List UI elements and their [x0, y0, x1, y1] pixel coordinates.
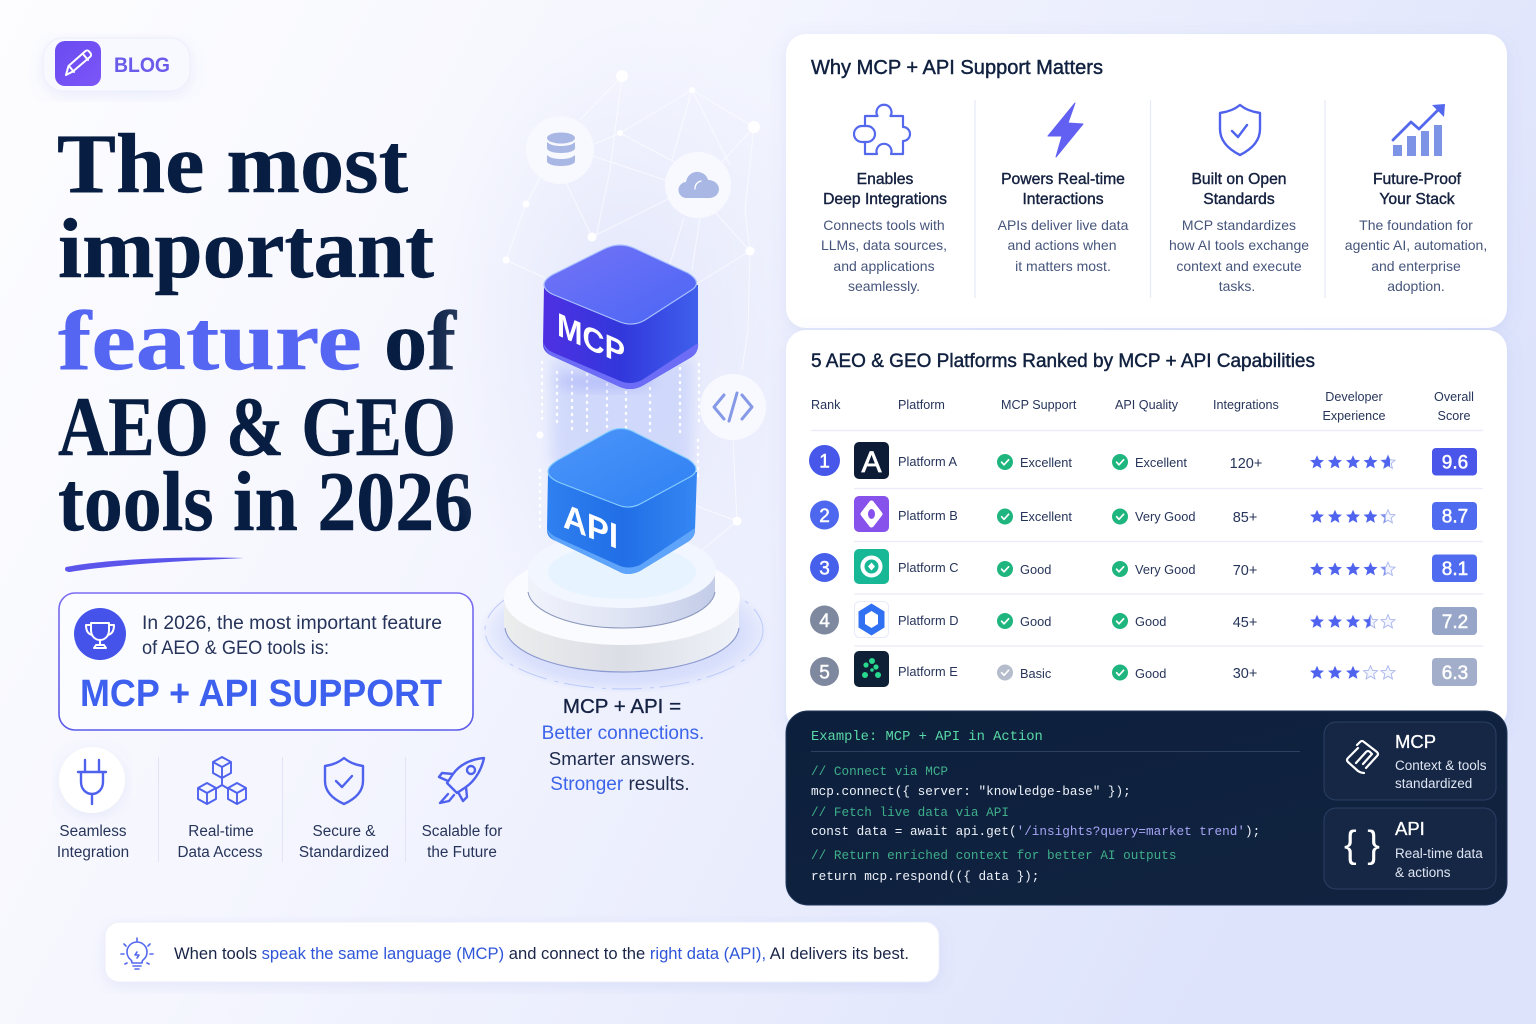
- row: Platform B: Very Good: [1135, 509, 1195, 524]
- row: Platform B: [810, 496, 1477, 532]
- row: Platform E: Good: [1135, 666, 1166, 681]
- column: real-time interactions: and actions when: [1008, 237, 1116, 253]
- row: Platform A: Excellent: [1020, 455, 1072, 470]
- table header: Experience: [1322, 409, 1386, 423]
- code block: // Fetch live data via API: [811, 805, 1009, 820]
- row: Platform B: 85+: [1233, 510, 1257, 526]
- dividers: [158, 757, 406, 862]
- code block: [811, 764, 1260, 884]
- icon: growth chart: [1393, 104, 1445, 156]
- row: Platform C: 70+: [1233, 563, 1257, 579]
- icon: cubes: [198, 757, 246, 804]
- feature: seamless integration: Integration: [57, 844, 129, 861]
- tagline: [542, 695, 704, 795]
- row: Platform A: 120+: [1230, 456, 1262, 472]
- column: future-proof: and enterprise: [1371, 258, 1461, 274]
- bottom callout: When tools speak the same language (MCP) and connect to the right data (API), AI delivers its best.: [174, 944, 909, 963]
- row: Platform D: 7.2: [1442, 612, 1468, 633]
- card: MCP: Context & tools: [1395, 758, 1487, 773]
- feature: secure and standardized: [299, 758, 389, 861]
- column: future-proof: adoption.: [1387, 278, 1445, 294]
- logo A: [854, 442, 889, 479]
- feature: real-time data access: Real-time: [188, 823, 254, 840]
- logo A: A: [861, 446, 882, 479]
- column: real-time interactions: APIs deliver live data: [998, 217, 1129, 233]
- title: of: [384, 294, 458, 388]
- column: open standards: context and execute: [1176, 258, 1302, 274]
- title: [57, 117, 473, 549]
- heading: 5 AEO & GEO Platforms Ranked by MCP + API Capabilities: [811, 350, 1315, 372]
- row: Platform C: Very Good: [1135, 562, 1195, 577]
- card: API: [1324, 808, 1496, 889]
- row: Platform C: Good: [1020, 562, 1051, 577]
- column: deep integrations: Deep Integrations: [823, 191, 947, 208]
- card: MCP: standardized: [1395, 776, 1472, 791]
- MCP cube: [543, 245, 698, 390]
- blog badge: [43, 38, 190, 91]
- icon: code: [700, 374, 766, 440]
- logo E: [854, 651, 889, 687]
- column: real-time interactions: [998, 103, 1129, 274]
- tagline: Stronger results.: [550, 774, 690, 795]
- column: future-proof: [1345, 104, 1487, 294]
- icon: shield: [325, 758, 363, 804]
- row: Platform D: Good: [1135, 614, 1166, 629]
- panel: platform ranking table: [786, 330, 1507, 730]
- row: Platform A: Platform A: [898, 454, 957, 469]
- code block: const data = await api.get('/insights?query=market trend');: [811, 824, 1260, 839]
- row: Platform C: [810, 549, 1477, 584]
- data stream between cubes: [540, 360, 699, 530]
- column: deep integrations: LLMs, data sources,: [821, 237, 947, 253]
- row: Platform E: [810, 651, 1477, 687]
- row: Platform B: 2: [819, 506, 830, 527]
- panel: why MCP + API support matters: [786, 34, 1507, 328]
- table header: Rank: [811, 398, 841, 412]
- icon: plug: [78, 760, 106, 804]
- callout: key feature: of AEO & GEO tools is:: [142, 638, 329, 659]
- row: Platform B: 8.7: [1442, 506, 1468, 528]
- icon: cloud: [665, 152, 731, 218]
- table header: Integrations: [1213, 398, 1279, 412]
- row: Platform E: 6.3: [1442, 663, 1468, 684]
- row: Platform A: 1: [819, 452, 830, 472]
- feature: secure and standardized: Secure &: [313, 823, 375, 840]
- icon: puzzle: [854, 105, 910, 154]
- row: Platform B: Excellent: [1020, 509, 1072, 524]
- row: Platform D: [810, 602, 1477, 638]
- icon: MCP knot: [1347, 741, 1378, 773]
- row: Platform E: Platform E: [898, 664, 958, 679]
- API cube: [547, 428, 697, 574]
- callout: key feature: In 2026, the most important feature: [142, 613, 442, 634]
- title: AEO & GEO: [58, 380, 456, 474]
- blog badge: BLOG: [114, 53, 170, 77]
- network graphic: [425, 0, 825, 660]
- card: MCP: MCP: [1395, 731, 1436, 752]
- icon: braces: { }: [1344, 824, 1380, 866]
- column: deep integrations: and applications: [833, 258, 935, 274]
- tagline: Smarter answers.: [549, 748, 695, 769]
- row: Platform A: [809, 442, 1477, 479]
- row: Platform E: 30+: [1233, 666, 1257, 682]
- platform base: [478, 532, 770, 694]
- node dots: [502, 70, 760, 526]
- table header: Overall: [1434, 390, 1474, 404]
- icon: trophy: [74, 608, 126, 660]
- callout: key feature: [59, 593, 473, 730]
- table header: MCP Support: [1001, 398, 1077, 412]
- column: open standards: how AI tools exchange: [1169, 237, 1309, 253]
- logo B: [854, 496, 889, 532]
- logo D: [854, 602, 888, 638]
- row: Platform A: Excellent: [1135, 455, 1187, 470]
- feature: seamless integration: [57, 747, 129, 861]
- row: Platform C: Platform C: [898, 560, 958, 575]
- tagline: MCP + API =: [563, 695, 681, 718]
- icon: pencil: [66, 50, 91, 75]
- table header: Score: [1438, 409, 1470, 423]
- code block: // Return enriched context for better AI outputs: [811, 848, 1176, 863]
- icon: lightbulb: [121, 938, 153, 969]
- code heading: Example: MCP + API in Action: [811, 729, 1043, 745]
- callout: key feature: MCP + API SUPPORT: [80, 673, 442, 715]
- feature: scalable: the Future: [427, 844, 497, 861]
- column: real-time interactions: Interactions: [1022, 191, 1104, 208]
- row: Platform D: 45+: [1233, 615, 1257, 631]
- code block: // Connect via MCP: [811, 764, 948, 779]
- column: future-proof: The foundation for: [1359, 217, 1473, 233]
- title: feature: [58, 294, 362, 388]
- row: Platform C: 3: [819, 558, 830, 580]
- icon: shield: [1220, 105, 1260, 155]
- feature: scalable: Scalable for: [422, 823, 502, 840]
- column: deep integrations: [821, 105, 947, 294]
- row: Platform C: 8.1: [1442, 559, 1468, 580]
- label: MCP: MCP: [557, 306, 625, 373]
- row: Platform D: Good: [1020, 614, 1051, 629]
- column: real-time interactions: Powers Real-time: [1001, 171, 1125, 188]
- code block: return mcp.respond(({ data });: [811, 869, 1039, 884]
- column: open standards: Standards: [1203, 191, 1275, 208]
- table header: Platform: [898, 398, 945, 412]
- icon: lightning: [1048, 103, 1083, 157]
- column: open standards: Built on Open: [1191, 171, 1287, 188]
- label: API: API: [563, 495, 618, 557]
- title: The most: [57, 117, 408, 211]
- column: future-proof: agentic AI, automation,: [1345, 237, 1487, 253]
- heading: Why MCP + API Support Matters: [811, 57, 1103, 79]
- panel: code example: [786, 711, 1507, 905]
- card: API: Real-time data: [1395, 846, 1483, 861]
- column: open standards: [1169, 105, 1309, 294]
- row: Platform B: Platform B: [898, 508, 958, 523]
- feature: real-time data access: [177, 757, 263, 861]
- column: open standards: tasks.: [1219, 278, 1255, 294]
- column: deep integrations: Connects tools with: [823, 217, 945, 233]
- row: Platform D: Platform D: [898, 613, 958, 628]
- column: future-proof: Future-Proof: [1373, 171, 1462, 188]
- card: API: & actions: [1395, 865, 1451, 880]
- icon: rocket: [439, 758, 484, 803]
- column: deep integrations: seamlessly.: [848, 278, 920, 294]
- table header: [811, 390, 1474, 423]
- row: Platform A: 9.6: [1442, 452, 1468, 474]
- table header: API Quality: [1115, 398, 1179, 412]
- column: real-time interactions: it matters most.: [1015, 258, 1111, 274]
- code block: mcp.connect({ server: "knowledge-base" });: [811, 784, 1131, 799]
- column: deep integrations: Enables: [857, 171, 913, 188]
- card: MCP: [1324, 722, 1496, 800]
- title underline stroke: [65, 557, 244, 572]
- row: Platform E: Basic: [1020, 666, 1052, 681]
- feature: seamless integration: Seamless: [59, 823, 127, 840]
- title: tools in 2026: [58, 455, 473, 549]
- logo C: [854, 549, 889, 584]
- feature: real-time data access: Data Access: [177, 844, 263, 861]
- row: Platform E: 5: [819, 662, 830, 684]
- icon: database: [526, 116, 594, 184]
- tagline: Better connections.: [542, 723, 704, 744]
- card: API: API: [1395, 818, 1425, 839]
- row: Platform D: 4: [819, 611, 830, 632]
- title: important: [58, 202, 434, 296]
- feature: secure and standardized: Standardized: [299, 844, 389, 861]
- column: future-proof: Your Stack: [1379, 191, 1455, 208]
- feature: scalable: [422, 758, 502, 861]
- column: open standards: MCP standardizes: [1182, 217, 1296, 233]
- table header: Developer: [1325, 390, 1383, 404]
- bottom callout: [105, 922, 939, 982]
